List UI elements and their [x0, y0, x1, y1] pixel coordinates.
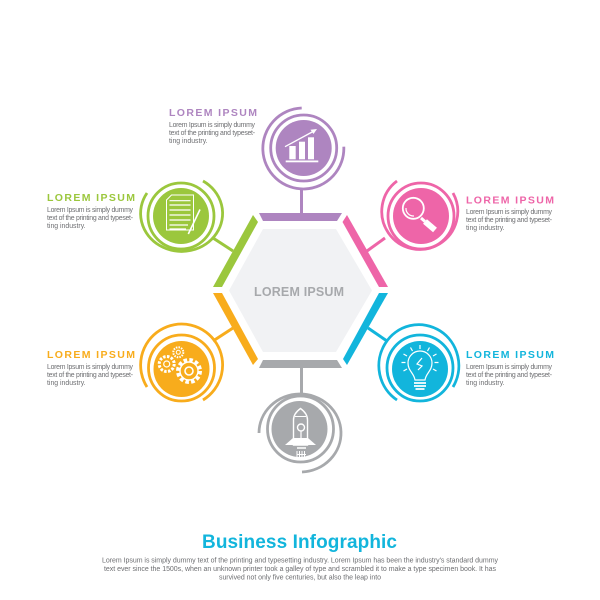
description text: Lorem Ipsum is simply dummy text of the printing and typesetting industry. Lorem Ipsum has been the industry's standard dummy [102, 558, 498, 564]
icon: bar chart [285, 129, 318, 162]
panel: orange gears step [47, 293, 258, 401]
icon: magnifier [403, 198, 435, 230]
text: blue: ting industry. [466, 380, 505, 387]
heading: purple: LOREM IPSUM [169, 107, 257, 119]
icon: light bulb [402, 345, 438, 389]
hexagon edge: blue [343, 293, 388, 365]
connector: orange [213, 328, 233, 341]
hexagon edge: orange [213, 293, 258, 365]
title: Business Infographic [202, 532, 397, 553]
badge: orange [141, 324, 223, 401]
badge: pink [382, 181, 458, 249]
hexagon edge: purple [259, 213, 342, 221]
panel: purple chart step [169, 107, 344, 221]
text: pink: ting industry. [466, 225, 505, 232]
panel: grey rocket step [259, 360, 342, 472]
text: blue: Lorem Ipsum is simply dummy [466, 364, 553, 371]
text: purple: text of the printing and typeset- [169, 130, 255, 137]
text: purple: ting industry. [169, 138, 208, 145]
icon: rocket [285, 408, 316, 458]
connector: grey [300, 367, 303, 393]
text: orange: ting industry. [47, 380, 86, 387]
text: pink: Lorem Ipsum is simply dummy [466, 209, 553, 216]
badge: purple [263, 108, 344, 189]
connector: blue [368, 328, 387, 341]
text: pink: text of the printing and typeset- [466, 217, 552, 224]
text: blue: text of the printing and typeset- [466, 372, 552, 379]
text: green: ting industry. [47, 223, 86, 230]
badge: grey [259, 394, 341, 472]
badge: blue [379, 325, 459, 401]
hexagon edge: green [213, 215, 258, 287]
connector: purple [300, 188, 303, 214]
text: green: text of the printing and typeset- [47, 215, 133, 222]
icon: document and pen [166, 195, 200, 234]
text: purple: Lorem Ipsum is simply dummy [169, 122, 256, 129]
badge: green [141, 181, 223, 251]
panel: green document step [47, 181, 258, 287]
hexagon edge: grey [259, 360, 342, 368]
description text: survived not only five centuries, but also the leap into [219, 574, 381, 582]
heading: blue: LOREM IPSUM [466, 349, 554, 361]
connector: pink [367, 238, 385, 251]
heading: pink: LOREM IPSUM [466, 194, 554, 206]
text: green: Lorem Ipsum is simply dummy [47, 207, 134, 214]
text: orange: Lorem Ipsum is simply dummy [47, 364, 134, 371]
heading: green: LOREM IPSUM [47, 192, 135, 204]
panel: pink magnifier step [342, 181, 554, 287]
description text: text ever since the 1500s, when an unknown printer took a galley of type and scrambled it to make a type specimen book. It has [104, 566, 496, 573]
connector: green [213, 238, 233, 251]
heading: orange: LOREM IPSUM [47, 349, 135, 361]
panel: blue bulb step [343, 293, 554, 401]
central hexagon [229, 229, 372, 352]
central hexagon: LOREM IPSUM [254, 285, 344, 299]
hexagon edge: pink [342, 215, 388, 287]
text: orange: text of the printing and typeset- [47, 372, 133, 379]
icon: gears [159, 347, 200, 382]
